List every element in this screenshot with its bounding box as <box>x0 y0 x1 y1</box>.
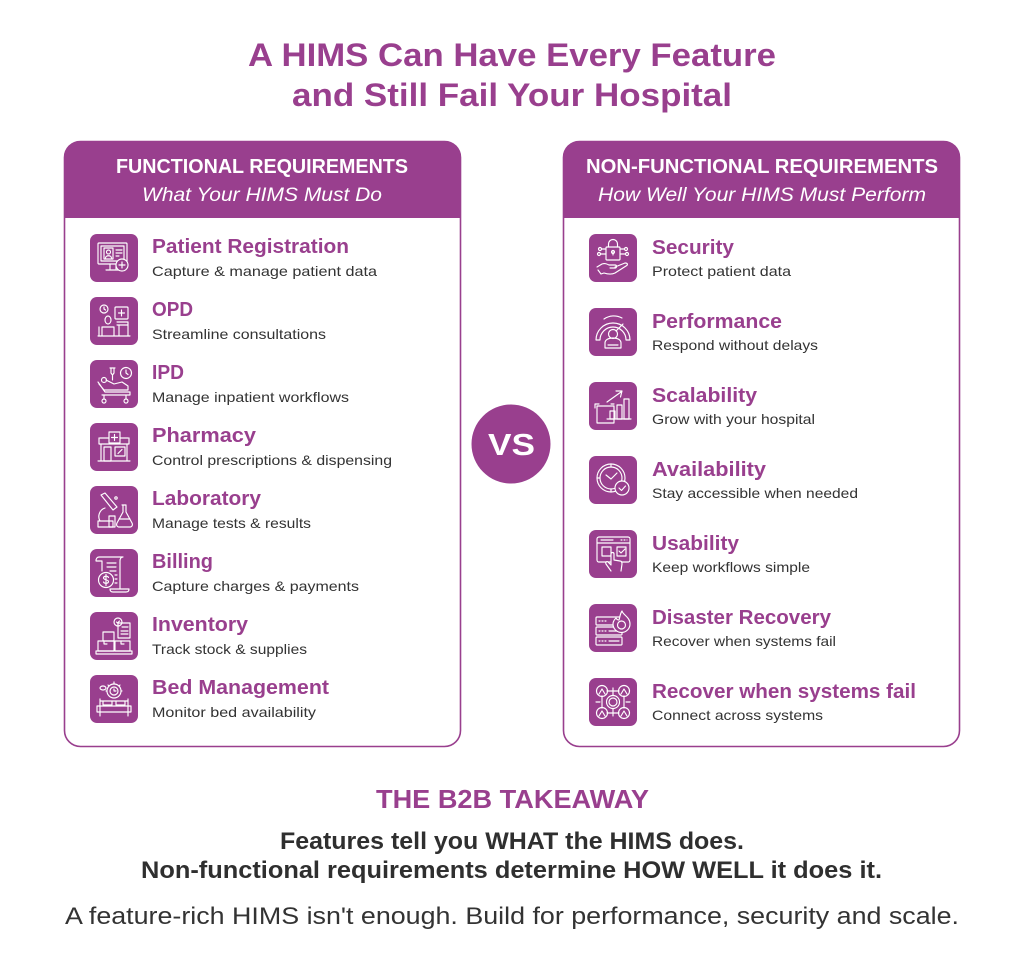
panel outline <box>564 142 960 746</box>
item: Laboratory <box>90 486 311 534</box>
item: Recover when systems fail <box>589 678 916 726</box>
panel header <box>563 141 960 218</box>
icon: connected network of users <box>589 678 637 726</box>
item title: Billing <box>152 551 213 573</box>
icon: growth bars <box>589 382 637 430</box>
item description: Protect patient data <box>652 264 792 279</box>
item title: Performance <box>652 311 782 333</box>
panel header <box>64 141 461 218</box>
item description: Connect across systems <box>652 708 823 723</box>
item title: Disaster Recovery <box>652 607 832 629</box>
panel header: What Your HIMS Must Do <box>142 184 382 206</box>
title <box>248 37 776 113</box>
item description: Respond without delays <box>652 338 818 353</box>
icon: boxes and checklist <box>90 612 138 660</box>
item description: Manage tests & results <box>152 516 311 531</box>
item description: Keep workflows simple <box>652 560 810 575</box>
item: Usability <box>589 530 810 578</box>
takeaway statement: Features tell you WHAT the HIMS does. <box>280 828 744 855</box>
panel: non-functional requirements <box>563 141 960 746</box>
item: OPD <box>90 297 326 345</box>
item title: Security <box>652 237 735 259</box>
item: Bed Management <box>90 675 329 723</box>
item title: Patient Registration <box>152 236 349 258</box>
item description: Capture charges & payments <box>152 579 359 594</box>
title: and Still Fail Your Hospital <box>292 77 732 113</box>
item description: Control prescriptions & dispensing <box>152 453 392 468</box>
takeaway heading: THE B2B TAKEAWAY <box>376 784 649 814</box>
icon: hand tapping window <box>589 530 637 578</box>
item title: Scalability <box>652 385 758 407</box>
icon: patient record monitor <box>90 234 138 282</box>
item: Billing <box>90 549 359 597</box>
item: Scalability <box>589 382 815 430</box>
icon: consultation room <box>90 297 138 345</box>
icon: bed with clock gear <box>90 675 138 723</box>
icon: server rack with flame <box>589 604 637 652</box>
item title: Availability <box>652 459 767 481</box>
item title: Pharmacy <box>152 425 257 447</box>
panel outline <box>64 142 460 746</box>
takeaway statement: Non-functional requirements determine HOW WELL it does it. <box>141 857 882 884</box>
vs badge: VS <box>488 427 535 462</box>
item title: Inventory <box>152 614 249 636</box>
closing line: A feature-rich HIMS isn't enough. Build for performance, security and scale. <box>65 903 959 930</box>
title: A HIMS Can Have Every Feature <box>248 37 776 73</box>
item description: Streamline consultations <box>152 327 326 342</box>
panel header: How Well Your HIMS Must Perform <box>598 184 926 206</box>
icon: pharmacy storefront <box>90 423 138 471</box>
item: Security <box>589 234 792 282</box>
icon: bill with dollar coin <box>90 549 138 597</box>
item: Performance <box>589 308 818 356</box>
icon: lock over hand <box>589 234 637 282</box>
panel header: NON-FUNCTIONAL REQUIREMENTS <box>586 156 938 178</box>
takeaway statement <box>141 828 882 884</box>
panel: functional requirements <box>64 141 461 746</box>
item title: OPD <box>152 299 193 321</box>
item: Patient Registration <box>90 234 378 282</box>
item title: Bed Management <box>152 677 329 699</box>
item description: Recover when systems fail <box>652 634 836 649</box>
item description: Track stock & supplies <box>152 642 307 657</box>
item description: Monitor bed availability <box>152 705 316 720</box>
item: Pharmacy <box>90 423 392 471</box>
vs badge <box>472 404 550 484</box>
item description: Stay accessible when needed <box>652 486 858 501</box>
icon: speed gauge with person <box>589 308 637 356</box>
icon: inpatient bed <box>90 360 138 408</box>
item title: Recover when systems fail <box>652 681 916 703</box>
item title: IPD <box>152 362 184 384</box>
panel header: FUNCTIONAL REQUIREMENTS <box>116 156 408 178</box>
item: Disaster Recovery <box>589 604 836 652</box>
item: Inventory <box>90 612 307 660</box>
item: Availability <box>589 456 858 504</box>
icon: clock with check <box>589 456 637 504</box>
item description: Manage inpatient workflows <box>152 390 349 405</box>
item title: Usability <box>652 533 740 555</box>
item description: Capture & manage patient data <box>152 264 378 279</box>
item title: Laboratory <box>152 488 262 510</box>
icon: microscope and flask <box>90 486 138 534</box>
item: IPD <box>90 360 349 408</box>
item description: Grow with your hospital <box>652 412 815 427</box>
